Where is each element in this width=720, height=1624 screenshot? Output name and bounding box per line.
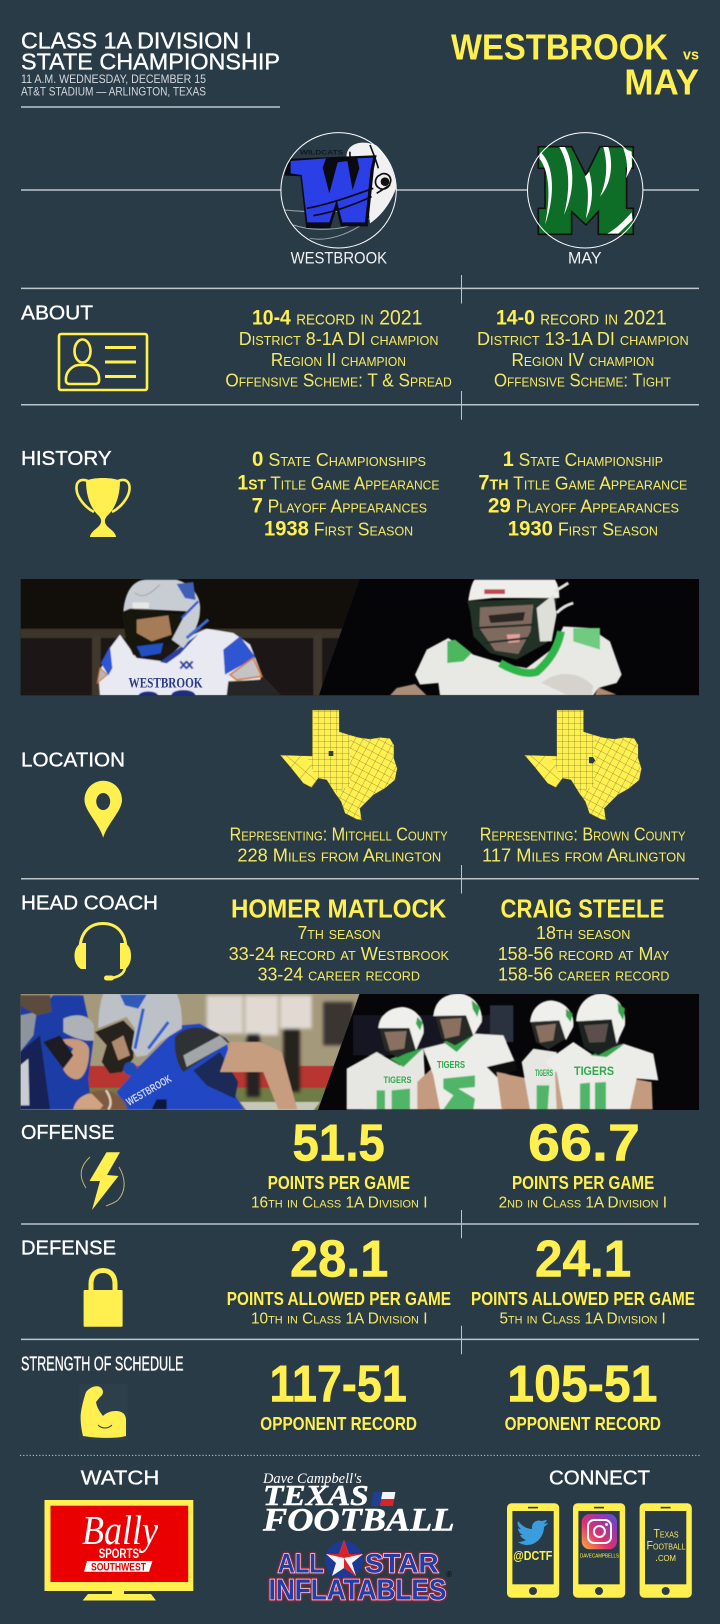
heading: history: HISTORY — [21, 447, 112, 470]
jersey lettering: Tigers: TIGERS — [535, 1068, 553, 1079]
stats: Westbrook offense: 51.5 — [292, 1115, 385, 1173]
jersey lettering: WESTBROOK — [124, 1073, 174, 1109]
header: matchup — [451, 26, 699, 102]
stats: Westbrook about: Offensive Scheme: T & Spread — [225, 370, 452, 391]
stats: May offense: 2nd in Class 1A Division I — [499, 1195, 667, 1212]
panel: connect — [507, 1467, 692, 1598]
map: Texas with Mitchell County — [280, 710, 397, 821]
logo: May — [538, 147, 633, 234]
header: game title: AT&T STADIUM — ARLINGTON, TEXAS — [21, 86, 206, 99]
team name: May: MAY — [568, 249, 602, 267]
stats: Craig Steele: 18th season — [536, 922, 630, 943]
map: Texas with Brown County — [524, 710, 642, 821]
text: May location: Representing: Brown County — [480, 824, 686, 845]
header: matchup: WESTBROOK — [451, 26, 668, 67]
logo: Dave Campbell's Texas Football: Dave Campbell's — [262, 1471, 362, 1487]
logo: Dave Campbell's Texas Football: TEXAS — [263, 1480, 369, 1512]
stats: May about: 14-0 record in 2021 — [496, 305, 667, 329]
icon: lightning bolt — [81, 1152, 124, 1210]
stats: Westbrook defense: POINTS ALLOWED PER GAME — [227, 1289, 451, 1309]
heading: location: LOCATION — [21, 749, 125, 772]
stats: Craig Steele: 158-56 record at May — [498, 943, 670, 964]
logo: Dave Campbell's Texas Football: FOOTBALL — [262, 1503, 454, 1539]
stats: May offense: POINTS PER GAME — [512, 1173, 654, 1193]
phone: website: Texas — [654, 1526, 678, 1540]
logo: Bally Sports Southwest: SPORTS — [99, 1546, 139, 1561]
stats: Westbrook offense: POINTS PER GAME — [268, 1173, 410, 1193]
logo: All Star Inflatables: ALL — [278, 1549, 324, 1579]
logo ring: Westbrook — [281, 133, 396, 248]
icon: Twitter bird — [518, 1520, 548, 1545]
header: game title: 11 A.M. WEDNESDAY, DECEMBER 15 — [21, 73, 206, 86]
icon: padlock — [84, 1270, 123, 1327]
logo: All Star Inflatables: ® — [446, 1570, 452, 1579]
photo strip: players 1 — [20, 578, 705, 701]
phone: Instagram — [573, 1503, 625, 1598]
stats: Homer Matlock: 7th season — [298, 922, 381, 943]
stats: Craig Steele: 158-56 career record — [498, 964, 669, 985]
stats: Westbrook offense — [251, 1115, 428, 1212]
heading: strength of schedule: STRENGTH OF SCHEDULE — [21, 1353, 184, 1376]
stats: May offense: 66.7 — [528, 1115, 640, 1173]
photo: Westbrook player — [20, 578, 365, 701]
text: Westbrook location: 228 Miles from Arlington — [237, 845, 441, 866]
panel: location — [21, 710, 686, 866]
stats: May schedule: 105-51 — [507, 1356, 658, 1414]
text: Westbrook location — [230, 824, 448, 866]
stats: May defense — [471, 1231, 695, 1328]
heading: offense: OFFENSE — [21, 1121, 114, 1144]
stats: Westbrook offense: 16th in Class 1A Division I — [251, 1195, 428, 1212]
panel: history — [21, 447, 688, 541]
photo strip: players 2 — [20, 992, 705, 1112]
dividers: about — [21, 275, 699, 420]
header: game title: STATE CHAMPIONSHIP — [21, 48, 280, 74]
icon: Instagram — [582, 1514, 617, 1549]
logo: Westbrook: WILDCATS — [300, 149, 344, 156]
stats: Westbrook history: 0 State Championships — [252, 448, 426, 471]
dividers: coach — [21, 865, 699, 894]
stats: Westbrook defense: 10th in Class 1A Division I — [251, 1311, 428, 1328]
jersey lettering: Tigers: TIGERS — [437, 1059, 465, 1071]
header: game title — [21, 28, 280, 107]
stats: May history — [478, 448, 688, 541]
dividers: defense — [21, 1210, 699, 1238]
stats: May about: Offensive Scheme: Tight — [494, 370, 671, 391]
stats: May history: 1 State Championship — [503, 448, 663, 471]
helmets — [377, 1075, 606, 1109]
team logos row — [21, 133, 699, 267]
stats: Westbrook history: 1st Title Game Appearance — [237, 471, 440, 494]
stats: Craig Steele — [498, 894, 670, 985]
stats: Westbrook schedule — [260, 1356, 417, 1434]
phone: Twitter: @DCTF — [513, 1549, 553, 1563]
stats: Westbrook defense — [227, 1231, 451, 1328]
jersey lettering: Tigers: TIGERS — [574, 1064, 614, 1078]
stats: Westbrook about — [225, 305, 452, 391]
text: May location — [480, 824, 686, 866]
heading: defense: DEFENSE — [21, 1236, 116, 1260]
jersey lettering: Tigers — [384, 1061, 614, 1083]
stats: Westbrook history: 1938 First Season — [264, 518, 413, 541]
logo ring: May — [528, 133, 643, 248]
icon: television — [44, 1500, 193, 1600]
heading: about: ABOUT — [21, 301, 93, 324]
team name: Westbrook: WESTBROOK — [291, 249, 387, 267]
text: May location: 117 Miles from Arlington — [482, 845, 686, 866]
stats: Westbrook defense: 28.1 — [290, 1231, 388, 1289]
heading: head coach: HEAD COACH — [21, 891, 158, 914]
header: matchup: MAY — [624, 61, 699, 102]
stats: Westbrook history — [237, 448, 440, 541]
panel: watch — [44, 1467, 193, 1600]
stats: May history: 1930 First Season — [508, 518, 658, 541]
phone: Instagram: DAVECAMPBELLS — [580, 1553, 619, 1559]
header: game title: CLASS 1A DIVISION I — [21, 28, 252, 54]
icon: flexed arm — [79, 1384, 128, 1440]
stats: Westbrook about: 10-4 record in 2021 — [252, 305, 422, 329]
logo: Bally Sports Southwest: SOUTHWEST — [91, 1561, 146, 1573]
stats: Homer Matlock: 33-24 career record — [258, 964, 420, 985]
stats: Westbrook about: Region II champion — [271, 349, 406, 370]
photo: May player — [315, 578, 705, 698]
heading: watch: WATCH — [81, 1467, 159, 1489]
logo: Bally Sports Southwest: Bally — [82, 1507, 159, 1553]
icon: id card — [59, 334, 147, 390]
photo: Westbrook quarterback — [20, 992, 365, 1112]
stats: May history: 7th Title Game Appearance — [478, 471, 688, 494]
jersey lettering: WESTBROOK — [128, 676, 203, 692]
text: Westbrook location: Representing: Mitchell County — [230, 824, 448, 845]
icon: Texas flag — [371, 1492, 395, 1506]
phone: Twitter — [507, 1503, 559, 1598]
stats: Westbrook schedule: 117-51 — [270, 1356, 407, 1414]
logo: Bally Sports Southwest — [82, 1507, 159, 1573]
icon: headset — [74, 924, 131, 980]
heading: connect: CONNECT — [549, 1467, 650, 1489]
photo: May team — [315, 992, 705, 1112]
panel: strength of schedule — [21, 1353, 661, 1440]
stats: Homer Matlock: HOMER MATLOCK — [231, 894, 447, 924]
icon: map pin — [84, 781, 122, 838]
logo: Dave Campbell's Texas Football — [262, 1471, 454, 1539]
header: matchup: vs — [683, 46, 699, 63]
panel: offense — [21, 1115, 667, 1212]
jersey lettering: Tigers: TIGERS — [384, 1075, 412, 1086]
stats: May about: Region IV champion — [512, 349, 654, 370]
phone: website: Football — [646, 1538, 686, 1552]
phone: website: .com — [655, 1552, 676, 1564]
stats: May about: District 13-1A DI champion — [477, 328, 689, 349]
panel: defense — [21, 1231, 695, 1328]
stats: Homer Matlock — [229, 894, 449, 985]
stats: May defense: 24.1 — [535, 1231, 631, 1289]
logo: All Star Inflatables: INFLATABLES — [269, 1574, 446, 1606]
panel: head coach — [21, 891, 670, 985]
stats: Westbrook about: District 8-1A DI champion — [239, 328, 438, 349]
dividers: schedule — [21, 1326, 699, 1354]
stats: May schedule: OPPONENT RECORD — [505, 1414, 661, 1434]
logo: Westbrook — [285, 143, 396, 239]
icon: trophy — [76, 478, 130, 537]
logo: All Star Inflatables: STAR — [365, 1549, 438, 1579]
phone: website — [640, 1503, 692, 1598]
stats: May about — [477, 305, 689, 391]
stats: Westbrook schedule: OPPONENT RECORD — [260, 1414, 417, 1434]
logo: All Star Inflatables — [269, 1540, 452, 1606]
stats: May defense: 5th in Class 1A Division I — [500, 1311, 666, 1328]
stats: Westbrook history: 7 Playoff Appearances — [252, 494, 427, 517]
panel: about — [21, 301, 689, 391]
stats: Homer Matlock: 33-24 record at Westbrook — [229, 943, 449, 964]
stats: May history: 29 Playoff Appearances — [488, 494, 679, 517]
stats: Craig Steele: CRAIG STEELE — [500, 894, 664, 924]
stats: May offense — [499, 1115, 667, 1212]
